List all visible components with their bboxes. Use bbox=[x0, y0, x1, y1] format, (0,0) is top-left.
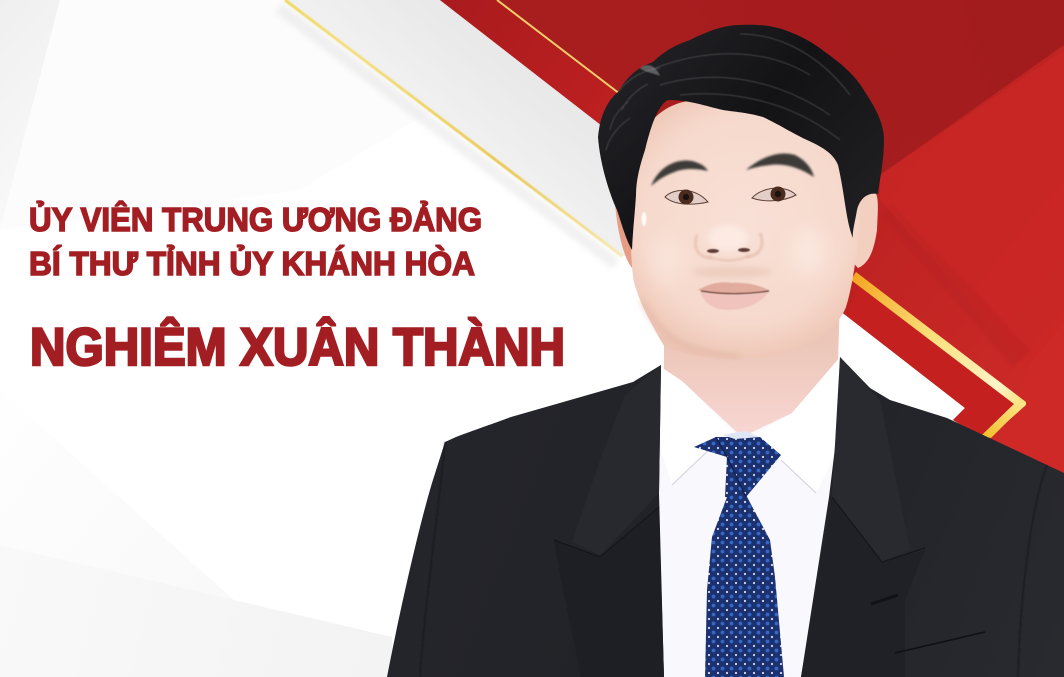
nose bbox=[695, 225, 762, 260]
ear: right bbox=[846, 190, 878, 268]
mouth bbox=[698, 282, 770, 310]
eyes bbox=[665, 186, 796, 204]
eyebrows bbox=[651, 153, 814, 186]
neck bbox=[664, 300, 840, 437]
panel: red diagonal background bbox=[440, 0, 1064, 490]
suit jacket bbox=[387, 357, 1064, 677]
shirt bbox=[659, 352, 840, 677]
gold line upper red band bbox=[497, 0, 620, 94]
portrait of the man bbox=[387, 25, 1064, 677]
heading: position titles: ỦY VIÊN TRUNG ƯƠNG ĐẢNG bbox=[29, 201, 482, 238]
thin gold line across white band bbox=[285, 0, 622, 256]
facial shading bbox=[642, 212, 826, 356]
heading: position titles: BÍ THƯ TỈNH ỦY KHÁNH HÒA bbox=[29, 245, 475, 282]
gold corner frame bbox=[851, 272, 1026, 438]
hair bbox=[598, 25, 884, 250]
face bbox=[631, 100, 862, 359]
suit pocket and buttonhole bbox=[871, 595, 985, 653]
heading: name: NGHIÊM XUÂN THÀNH bbox=[30, 316, 565, 377]
ear: left bbox=[614, 190, 640, 268]
necktie bbox=[694, 431, 784, 677]
shirt collar bbox=[661, 357, 840, 493]
heading: position titles bbox=[29, 201, 482, 282]
suit lapels bbox=[420, 357, 1047, 677]
